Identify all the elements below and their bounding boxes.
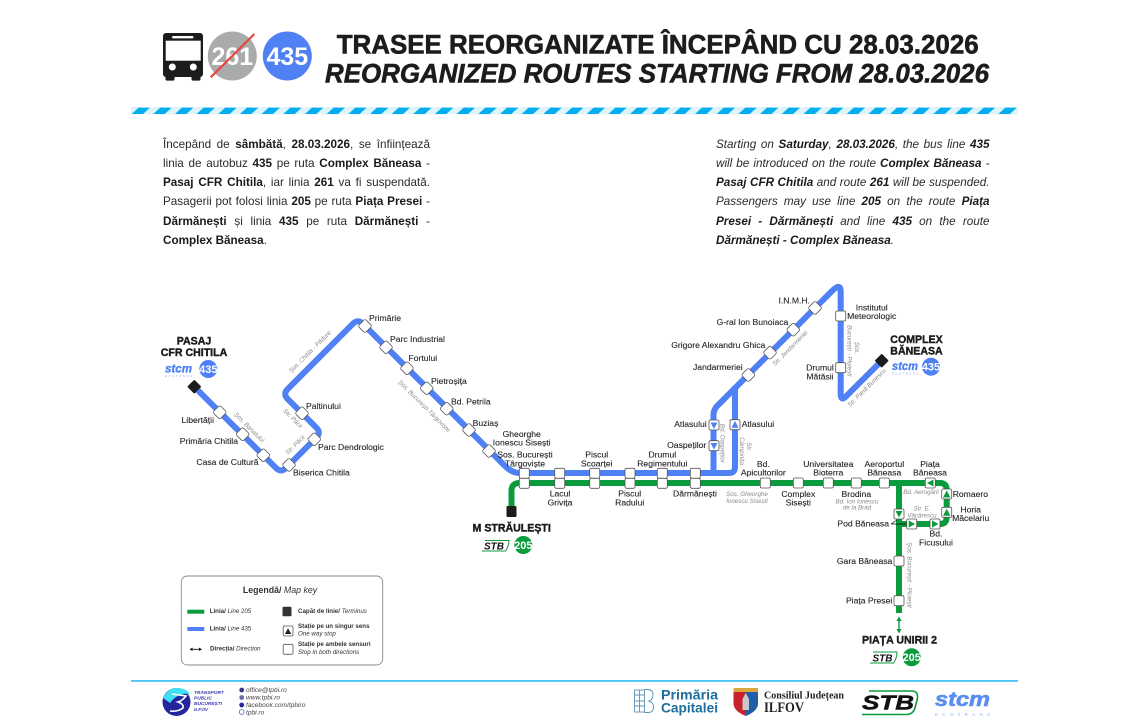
street names: Str. E. — [914, 505, 930, 512]
legend: one way stop: Stație pe un singur sens — [298, 623, 370, 630]
legend — [181, 576, 383, 665]
stop labels east: Piața — [920, 459, 940, 469]
stop labels north-east: I.N.M.H. — [778, 296, 810, 306]
stop labels centre: Piscul — [618, 488, 641, 498]
legend: line 435: Linia/ Line 435 — [210, 626, 252, 633]
stop labels centre: Radului — [615, 498, 644, 508]
street names: Str. Păcii — [284, 434, 307, 457]
terminus: Piața Unirii 2: 205 — [903, 652, 921, 664]
stop labels centre: Grivița — [548, 498, 573, 508]
stop labels centre: Oaspeților — [667, 440, 706, 450]
stop labels west: Biserica Chitila — [293, 468, 350, 478]
street names: Bd. Aerogării — [903, 489, 939, 496]
stop labels east: Horia — [960, 504, 981, 514]
legend: stop in both directions: Stație pe ambele sensuri — [298, 641, 371, 648]
stop labels west: Casa de Cultură — [196, 457, 259, 467]
legend: terminus — [282, 607, 367, 616]
terminus: Complex Băneasa: ECOTRANS — [892, 372, 918, 376]
terminus: M Străulești: M STRĂULEȘTI — [473, 522, 551, 534]
logo: TPBI: PUBLIC — [194, 696, 212, 702]
terminus: Pasaj CFR Chitila: ECOTRANS — [165, 374, 192, 378]
title — [325, 29, 989, 88]
stop labels east: Gara Băneasa — [837, 556, 893, 566]
stop labels west: Ionescu Sisești — [493, 438, 551, 448]
street names: București - Ploiești — [846, 325, 852, 377]
logo: STB — [862, 691, 918, 714]
stop labels west: Libertății — [182, 415, 214, 425]
terminus: Complex Băneasa: 435 — [922, 362, 940, 374]
stop labels west: Bd. Petrila — [451, 396, 491, 406]
stop labels west — [180, 313, 553, 478]
stop labels west: Parc Industrial — [390, 334, 445, 344]
stop labels centre — [548, 419, 774, 508]
terminus: Pasaj CFR Chitila: PASAJ — [177, 336, 211, 348]
logo: TPBI: BUCUREȘTI — [194, 701, 223, 707]
logo: STCM Ecotrans: stcm — [935, 689, 990, 711]
stop labels west: Paltinului — [306, 401, 341, 411]
street names: Str. Păcii — [281, 408, 304, 430]
stop labels north-east: G-ral Ion Bunoiaca — [717, 317, 789, 327]
one-way stops line 435 — [709, 420, 740, 451]
stop labels east: Sisești — [786, 498, 811, 508]
text block: English notice: Passengers may use line 205 on the route Piața — [716, 195, 990, 208]
stop labels east: Pod Băneasa — [837, 518, 889, 528]
one-way stops line 205 — [891, 478, 952, 529]
stop labels north-east: Mătăsii — [806, 371, 834, 381]
legend: Legendă/ Map key — [243, 585, 318, 595]
icon: suspended line 261: 261 — [211, 43, 253, 71]
terminus: M Străulești: STB — [484, 542, 504, 552]
logo: STB: STB — [862, 692, 914, 714]
title: TRASEE REORGANIZATE ÎNCEPÂND CU 28.03.2026 — [337, 29, 979, 59]
stop labels north-east: Institutul — [856, 302, 888, 312]
terminus: Piața Unirii 2: PIAȚA UNIRII 2 — [862, 634, 937, 646]
logo: STCM Ecotrans: ECOTRANS — [935, 712, 990, 717]
logo: Consiliul Județean Ilfov — [734, 688, 844, 716]
legend: stop in both directions: Stop in both directions — [298, 649, 359, 656]
stop labels centre: Atlasului — [742, 419, 774, 429]
street names: Văcărescu — [907, 512, 937, 519]
stop labels centre: Scoarței — [581, 458, 613, 468]
stop labels centre: Dărmănești — [673, 488, 717, 498]
logo: TPBI — [162, 688, 225, 716]
stop labels centre: Lacul — [550, 488, 570, 498]
icon: suspended line 261 — [208, 32, 257, 80]
stop labels west: Primăria Chitila — [180, 436, 238, 446]
contact details — [239, 687, 306, 716]
stop labels north-east: Jandarmeriei — [693, 362, 743, 372]
text block: English notice: Dărmănești - Complex Băneasa. — [716, 234, 894, 247]
terminus: Piața Unirii 2 — [862, 616, 937, 666]
street names: Bd. Ion Ionescu — [836, 499, 879, 506]
title: REORGANIZED ROUTES STARTING FROM 28.03.2026 — [325, 58, 989, 88]
stop labels east: Băneasa — [867, 468, 901, 478]
stop labels west: Primărie — [369, 313, 401, 323]
text block: English notice: Starting on Saturday, 28.03.2026, the bus line 435 — [716, 138, 990, 150]
stop labels east: Ficusului — [919, 538, 953, 548]
icon: bus — [163, 33, 203, 81]
terminus: Pasaj CFR Chitila: 435 — [199, 364, 217, 376]
logo: Primăria Capitalei — [634, 688, 718, 716]
stop labels centre: Drumul — [648, 450, 676, 460]
stop labels east: Piața Presei — [846, 596, 892, 606]
stop labels east: Aeroportul — [864, 459, 904, 469]
stop labels north-east: Grigore Alexandru Ghica — [671, 340, 766, 350]
logo: Consiliul Județean Ilfov: ILFOV — [764, 700, 804, 716]
street names: Șos. București - Ploiești — [905, 542, 912, 608]
text block: English notice: Pasaj CFR Chitila and route 261 will be suspended. — [716, 176, 989, 189]
legend: line 205 — [187, 608, 252, 615]
text block: Romanian notice: Pasaj CFR Chitila, iar linia 261 va fi suspendată. — [163, 176, 430, 189]
street names: Str. — [745, 442, 752, 452]
stop labels east: Romaero — [953, 489, 988, 499]
terminus: M Străulești — [473, 506, 551, 554]
stop labels west: Târgoviște — [505, 458, 545, 468]
icon: new line 435 — [263, 32, 312, 80]
stop labels east: Bioterra — [813, 468, 844, 478]
terminus: M Străulești: 205 — [514, 540, 532, 552]
stop labels centre: Atlasului — [674, 419, 707, 429]
stop labels east: Măcelariu — [952, 513, 990, 523]
terminus: Complex Băneasa — [875, 334, 943, 376]
text block: Romanian notice: Pasagerii pot folosi linia 205 pe ruta Piața Presei - — [163, 195, 430, 208]
contact details: www.tpbi.ro — [246, 695, 280, 702]
stop labels west: Șos. București — [497, 450, 553, 460]
route line 435 — [194, 287, 882, 473]
logo: TPBI: TRANSPORT — [194, 690, 225, 696]
street names — [232, 325, 939, 608]
street names: de la Brad — [843, 505, 872, 512]
text block: Romanian notice — [162, 138, 430, 247]
terminus: Complex Băneasa: stcm — [892, 361, 918, 373]
route line 205 — [512, 483, 947, 613]
street names: Bd. Oaspeților — [719, 424, 726, 464]
logo: Primăria Capitalei: Primăria — [661, 688, 718, 702]
stops on diagonal segments — [213, 301, 822, 472]
stop labels centre: Piscul — [585, 450, 608, 460]
text block: English notice — [716, 138, 990, 247]
stop labels east — [741, 459, 990, 606]
legend: one way stop — [283, 623, 370, 638]
terminus: Complex Băneasa: BĂNEASA — [890, 344, 943, 358]
text block: English notice: will be introduced on the route Complex Băneasa - — [716, 157, 990, 170]
street names: Str. Pană Bunescu — [846, 367, 888, 409]
stop labels north-east: Meteorologic — [847, 311, 897, 321]
logo: STCM Ecotrans — [935, 689, 990, 717]
contact details: facebook.com/tpbiro — [246, 702, 306, 709]
terminus: Complex Băneasa: COMPLEX — [890, 334, 943, 346]
street names: Șos. Chitila - Pădure — [288, 329, 333, 375]
text block: Romanian notice: linia de autobuz 435 pe ruta Complex Băneasa - — [163, 157, 430, 170]
terminus: Pasaj CFR Chitila: stcm — [165, 364, 192, 376]
legend: line 205: Linia/ Line 205 — [210, 608, 252, 615]
stop labels west: Fortului — [408, 353, 437, 363]
contact details: office@tpbi.ro — [246, 687, 287, 694]
icon: new line 435: 435 — [266, 43, 308, 71]
stop labels east: Universitatea — [803, 459, 854, 469]
text block: Romanian notice: Complex Băneasa. — [163, 234, 267, 247]
legend: one way stop: One way stop — [298, 630, 336, 638]
street names: Șos. Gheorghe — [726, 491, 768, 498]
stop labels north-east: Drumul — [806, 363, 834, 373]
legend: stop in both directions — [283, 641, 371, 656]
stop labels west: Pietroșița — [431, 376, 467, 386]
stop labels east: Complex — [781, 489, 816, 499]
legend: line 435 — [187, 626, 252, 633]
terminus: Pasaj CFR Chitila: CFR CHITILA — [161, 347, 228, 359]
logo: TPBI: ILFOV — [194, 707, 209, 713]
text block: Romanian notice: Începând de sâmbătă, 28.03.2026, se înființează — [163, 138, 430, 150]
street names: Str. Jandarmeriei — [771, 329, 810, 368]
street names: Câmpinița — [738, 437, 745, 465]
logo: Consiliul Județean Ilfov: Consiliul Județean — [764, 690, 844, 702]
stop labels east: Apicultorilor — [741, 468, 786, 478]
terminus: Piața Unirii 2: STB — [872, 654, 892, 664]
stop labels centre: Regimentului — [637, 458, 687, 468]
stop labels west: Parc Dendrologic — [318, 442, 385, 452]
logo: Primăria Capitalei: Capitalei — [661, 700, 718, 716]
stop labels west: Buziaș — [473, 418, 498, 428]
text block: English notice: Presei - Dărmănești and line 435 on the route — [716, 215, 990, 228]
street names: Șos. București-Târgoviște — [396, 379, 452, 434]
contact details: tpbi.ro — [246, 710, 265, 716]
stops on horizontal and vertical segments — [519, 311, 904, 606]
street names: Ionescu Sisești — [726, 498, 768, 505]
legend: direction: Direcția/ Direction — [210, 646, 261, 652]
legend: terminus: Capăt de linie/ Terminus — [298, 608, 367, 615]
stop labels east: Brodina — [841, 489, 871, 499]
stop labels east: Bd. — [757, 459, 770, 469]
stop labels east: Bd. — [930, 528, 942, 538]
stop labels east: Băneasa — [913, 468, 947, 478]
street names: Șos. — [853, 342, 860, 354]
text block: Romanian notice: Dărmănești și linia 435 pe ruta Dărmănești - — [163, 215, 430, 228]
terminus: Pasaj CFR Chitila — [161, 336, 228, 394]
street names: Șos. Banatului — [232, 411, 266, 445]
stop labels west: Gheorghe — [503, 429, 541, 439]
stop labels north-east — [671, 296, 897, 381]
